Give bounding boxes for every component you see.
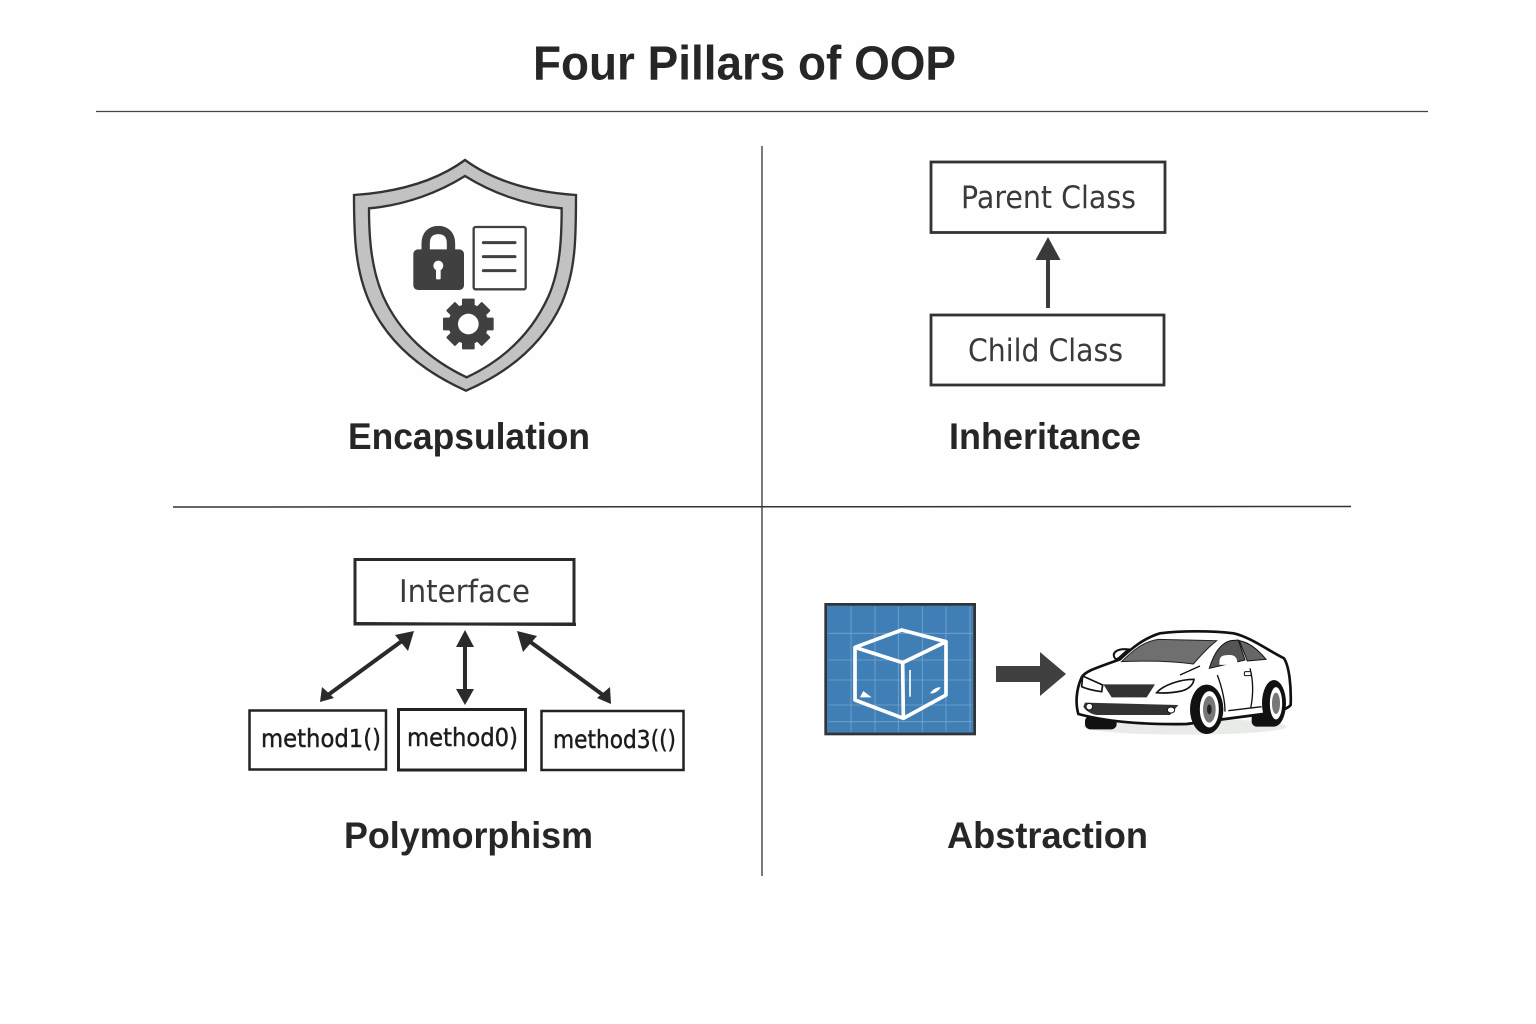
interface box [355, 560, 576, 624]
icon: car [1077, 631, 1291, 735]
child class box: Child Class [968, 333, 1123, 369]
label: encapsulation: Encapsulation [348, 416, 590, 457]
icon: padlock [413, 230, 464, 290]
panel: abstraction [826, 604, 1291, 856]
grille [1103, 684, 1155, 697]
label: polymorphism: Polymorphism [344, 815, 593, 856]
label: abstraction: Abstraction [947, 815, 1148, 856]
arrow: interface to method1 [320, 631, 414, 702]
method1 box [250, 710, 386, 770]
method1 box: method1() [261, 724, 381, 753]
windshield and side windows [1122, 639, 1217, 664]
method3 box: method3(() [553, 725, 676, 754]
arrow: interface to method3 [517, 631, 611, 704]
wheels [1190, 685, 1223, 734]
method0 box [398, 710, 526, 770]
icon: document [474, 227, 526, 289]
arrow: blueprint to car [996, 652, 1066, 696]
icon: shield with lock, document and gear [354, 160, 576, 391]
child class box [931, 315, 1164, 385]
method3 box [542, 711, 684, 770]
parent class box [931, 162, 1165, 232]
arrow: interface to method0 [456, 630, 474, 705]
mirror [1114, 649, 1128, 659]
body details [1180, 666, 1262, 712]
title: Four Pillars of OOP [533, 38, 956, 90]
blueprint with cube [826, 604, 975, 734]
method0 box: method0) [407, 723, 518, 752]
panel: encapsulation [348, 160, 590, 457]
interface box: Interface [399, 574, 530, 610]
panel: polymorphism [250, 560, 684, 856]
arrow: child to parent [1036, 237, 1060, 308]
label: inheritance: Inheritance [949, 416, 1141, 457]
parent class box: Parent Class [961, 180, 1136, 216]
panel: inheritance [931, 162, 1165, 457]
icon: gear [443, 299, 494, 349]
headlights [1082, 676, 1103, 692]
